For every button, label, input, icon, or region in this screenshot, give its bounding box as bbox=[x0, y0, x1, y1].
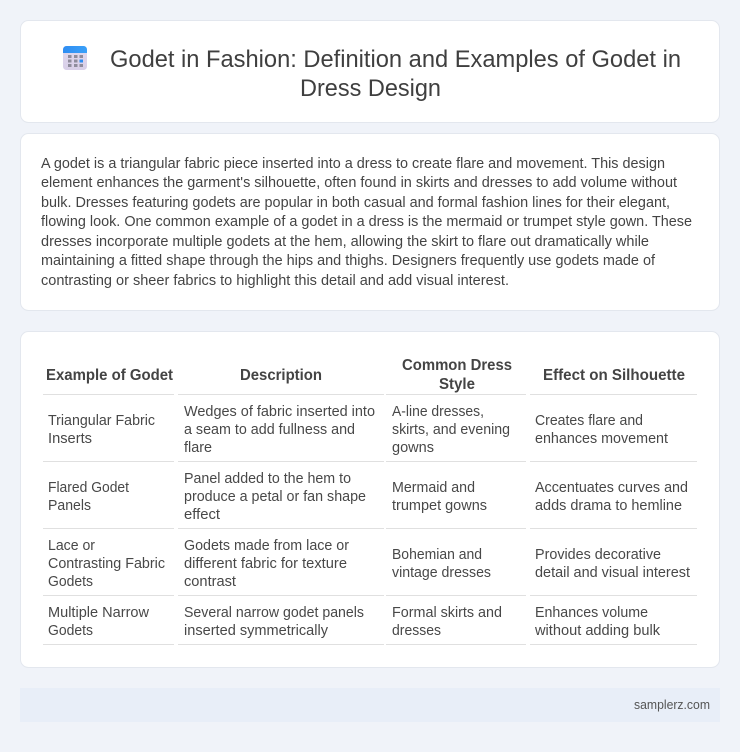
text block: definition paragraph bbox=[41, 156, 692, 289]
table row: multiple narrow godets: inserted symmetrically bbox=[184, 623, 329, 639]
table row: triangular fabric inserts: gowns bbox=[392, 440, 434, 456]
table row: triangular fabric inserts: Inserts bbox=[48, 431, 92, 447]
text block: definition paragraph: bulk. Dresses featuring godets are popular in both casual and formal fashion lines for their elegant, bbox=[41, 195, 670, 211]
table row: triangular fabric inserts: Triangular Fabric bbox=[48, 413, 155, 429]
text block: definition paragraph: A godet is a triangular fabric piece inserted into a dress to create flare and movement. This design bbox=[41, 156, 665, 172]
table row: lace or contrasting fabric godets: Godets made from lace or bbox=[184, 538, 349, 554]
table header: Style bbox=[439, 376, 475, 393]
table header: Description bbox=[240, 367, 322, 384]
table row: triangular fabric inserts: A-line dresses, bbox=[392, 404, 484, 420]
table row: flared godet panels: trumpet gowns bbox=[392, 498, 487, 514]
table row: flared godet panels: Mermaid and bbox=[392, 480, 475, 496]
table row: flared godet panels: Flared Godet bbox=[48, 480, 129, 496]
table row: lace or contrasting fabric godets: vintage dresses bbox=[392, 565, 491, 581]
footer bar bbox=[20, 688, 720, 722]
table header bbox=[46, 357, 685, 393]
panel: title card bbox=[20, 20, 720, 122]
table row: triangular fabric inserts bbox=[48, 404, 668, 456]
title: Godet in Fashion: Definition and Examples of Godet in bbox=[110, 46, 681, 73]
title bbox=[110, 46, 681, 102]
table row: triangular fabric inserts: a seam to add fullness and bbox=[184, 422, 355, 438]
table row: multiple narrow godets bbox=[48, 605, 661, 639]
table row: triangular fabric inserts: Creates flare and bbox=[535, 413, 643, 429]
table row: flared godet panels: Accentuates curves and bbox=[535, 480, 688, 496]
table row: triangular fabric inserts: Wedges of fabric inserted into bbox=[184, 404, 375, 420]
panel: intro text bbox=[20, 134, 720, 310]
icon: calendar bbox=[63, 46, 87, 70]
table row: multiple narrow godets: Formal skirts and bbox=[392, 605, 502, 621]
table row: multiple narrow godets: without adding bulk bbox=[534, 623, 661, 639]
text block: definition paragraph: element enhances the garment's silhouette, often found in skirts and dresses to add volume without bbox=[41, 175, 677, 191]
table row: multiple narrow godets: Several narrow godet panels bbox=[184, 605, 364, 621]
table row: flared godet panels: Panel added to the hem to bbox=[184, 471, 351, 487]
table row: multiple narrow godets: Godets bbox=[48, 623, 93, 639]
table row: multiple narrow godets: Enhances volume bbox=[535, 605, 648, 621]
text block: definition paragraph: contrasting or sheer fabrics to highlight this detail and add visual interest. bbox=[41, 273, 509, 289]
table row: flared godet panels: adds drama to hemline bbox=[535, 498, 682, 514]
table row: lace or contrasting fabric godets: different fabric for texture bbox=[184, 556, 347, 572]
table row: lace or contrasting fabric godets: Contrasting Fabric bbox=[48, 556, 165, 572]
table row: triangular fabric inserts: skirts, and evening bbox=[392, 422, 510, 438]
table row: flared godet panels: produce a petal or fan shape bbox=[184, 489, 366, 505]
table row: flared godet panels: Panels bbox=[48, 498, 91, 514]
table header: Common Dress bbox=[402, 357, 512, 374]
table row: lace or contrasting fabric godets: detail and visual interest bbox=[535, 565, 690, 581]
table row: lace or contrasting fabric godets: Godets bbox=[48, 574, 93, 590]
table row: lace or contrasting fabric godets: Bohemian and bbox=[392, 547, 482, 563]
table row: lace or contrasting fabric godets bbox=[48, 538, 690, 590]
table header: Effect on Silhouette bbox=[543, 367, 685, 384]
table row: lace or contrasting fabric godets: Lace or bbox=[48, 538, 95, 554]
text block: definition paragraph: maintaining a fitted shape through the hips and thighs. Designers frequently use godets made of bbox=[41, 253, 656, 269]
text block: definition paragraph: dresses incorporate multiple godets at the hem, allowing the skirt to flare out dramatically while bbox=[41, 234, 649, 250]
panel: table card bbox=[20, 332, 720, 668]
table row: triangular fabric inserts: enhances movement bbox=[535, 431, 668, 447]
table row: lace or contrasting fabric godets: contrast bbox=[184, 574, 236, 590]
table header: Example of Godet bbox=[46, 367, 173, 384]
table row: flared godet panels: effect bbox=[184, 507, 220, 523]
footer source text: samplerz.com bbox=[634, 698, 710, 712]
text block: definition paragraph: flowing look. One common example of a godet in a dress is the mermaid or trumpet style gown. These bbox=[41, 214, 692, 230]
table row: triangular fabric inserts: flare bbox=[184, 440, 212, 456]
table row: multiple narrow godets: Multiple Narrow bbox=[48, 605, 149, 621]
title: Dress Design bbox=[300, 75, 441, 102]
table row: multiple narrow godets: dresses bbox=[392, 623, 441, 639]
table row: flared godet panels bbox=[48, 471, 688, 523]
table row: lace or contrasting fabric godets: Provides decorative bbox=[535, 547, 661, 563]
